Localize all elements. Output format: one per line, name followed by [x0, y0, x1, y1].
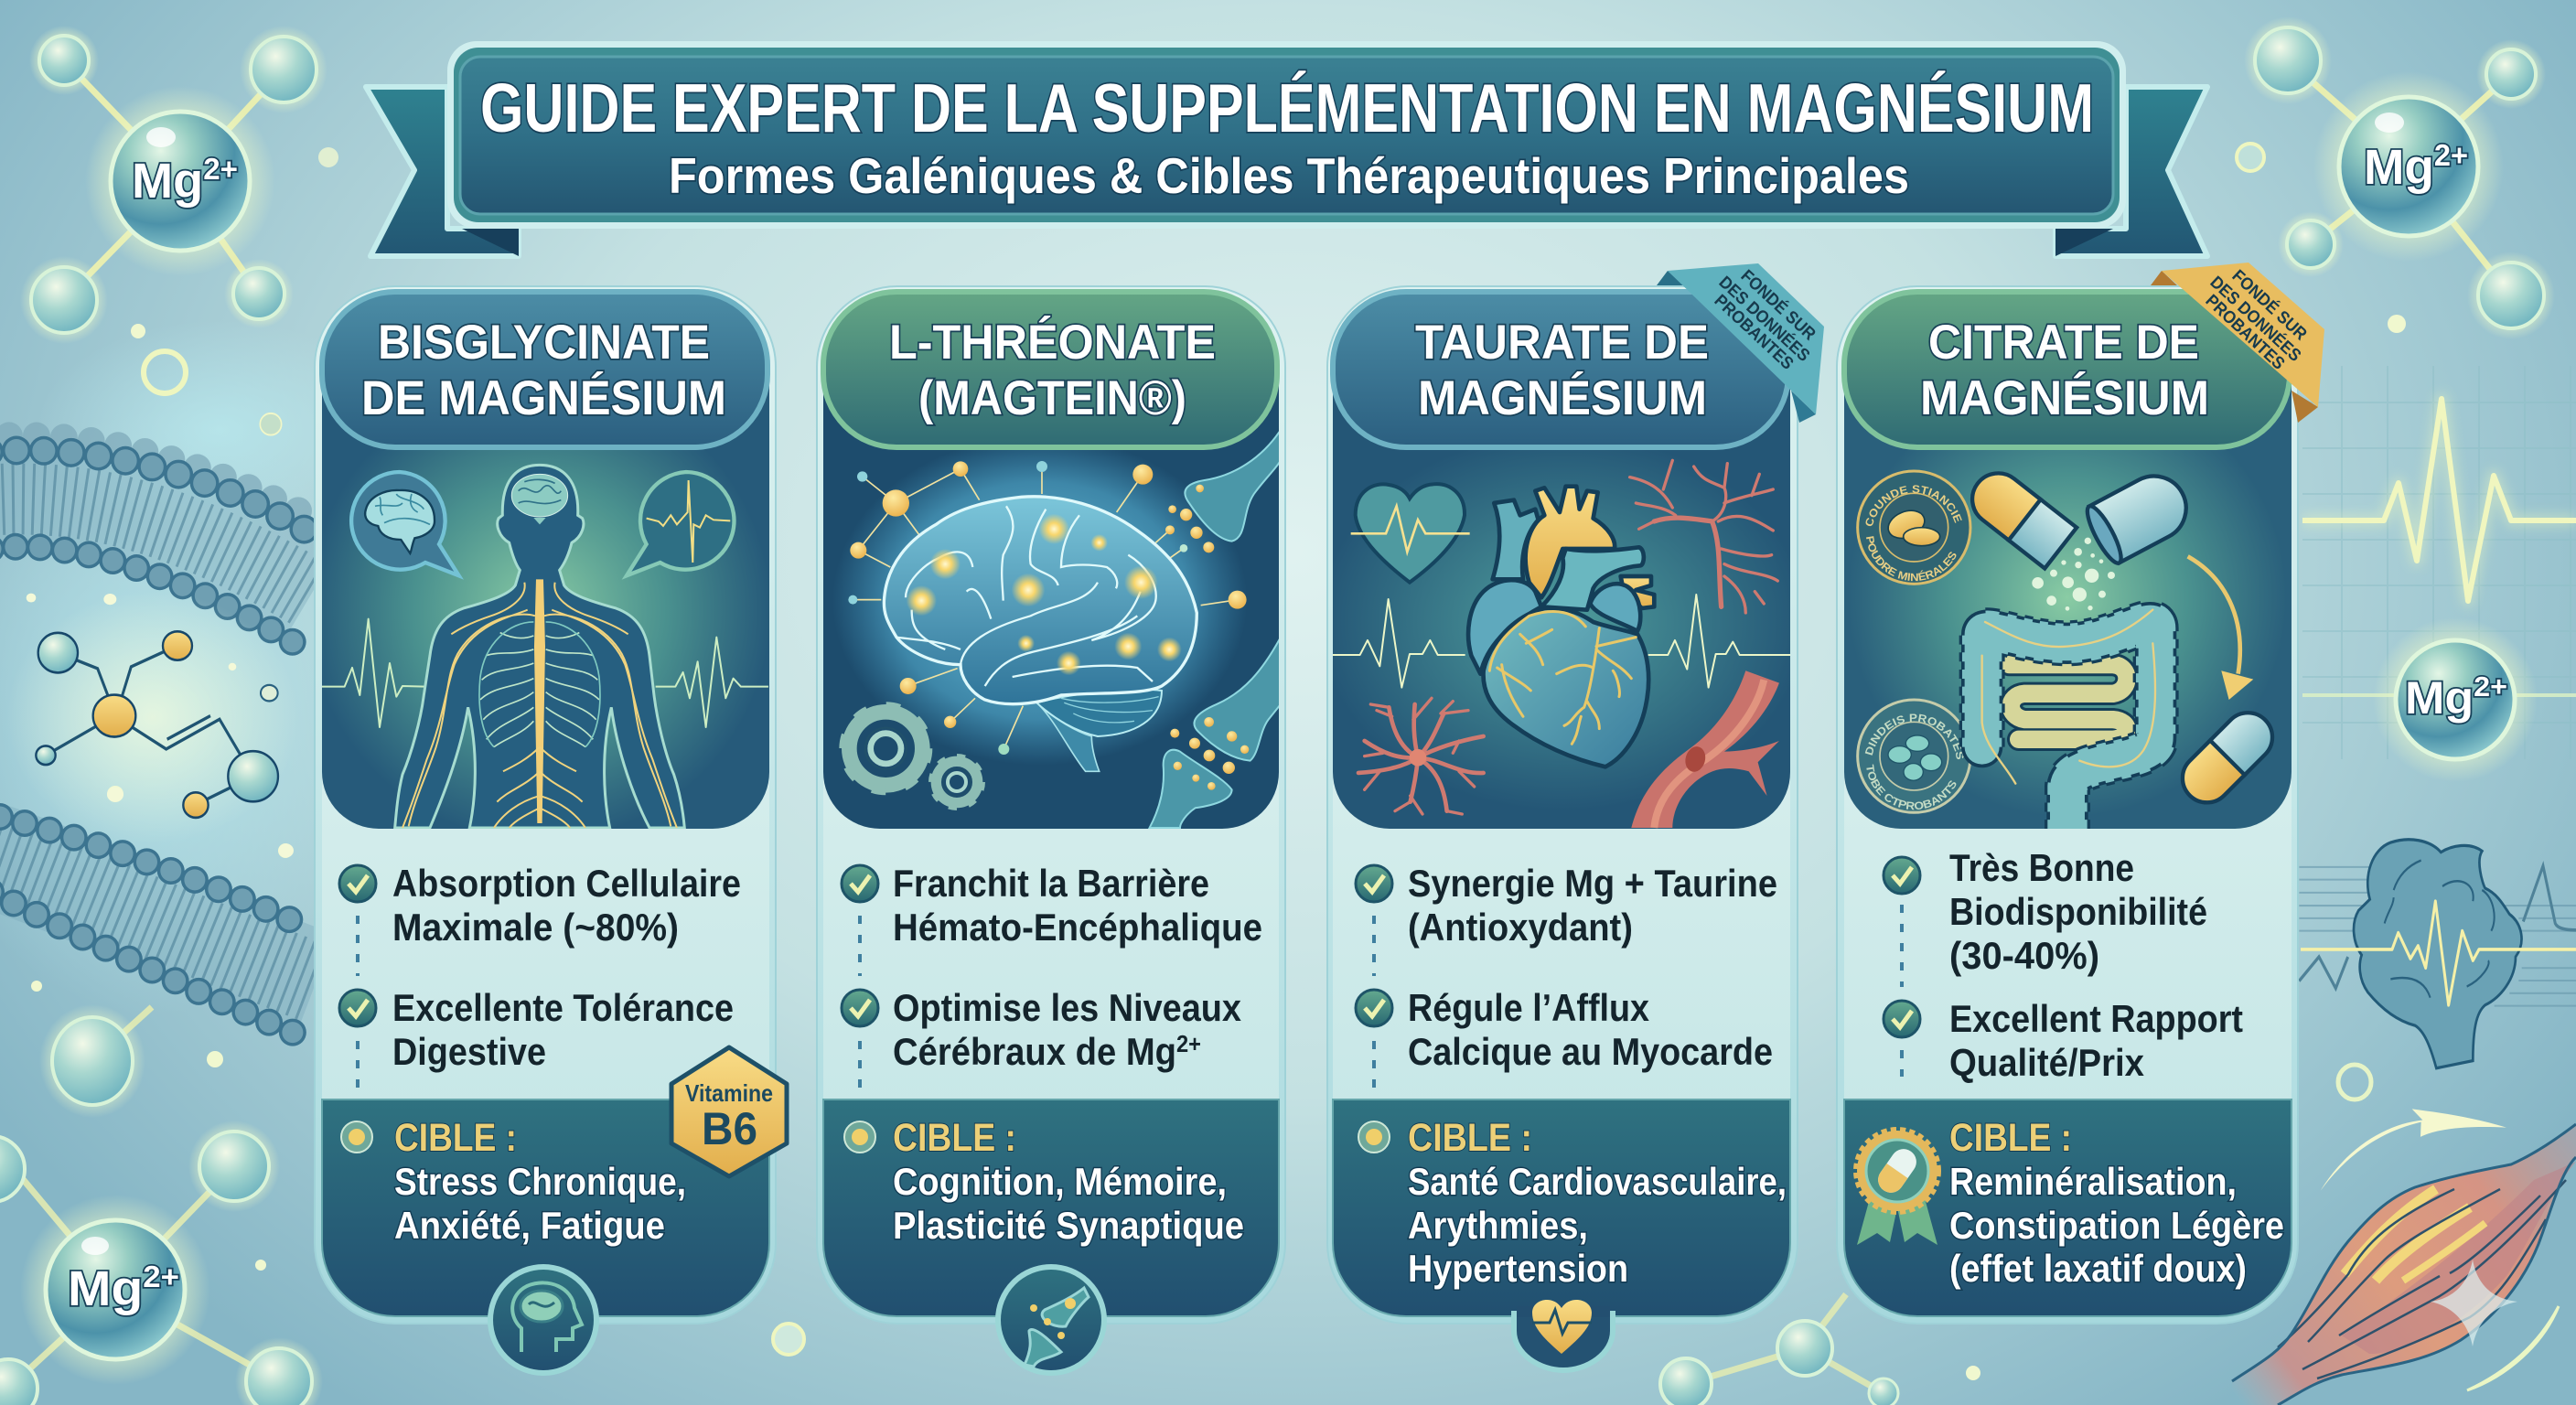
anatomical heart [1468, 487, 1654, 767]
target panel: Hypertension [1408, 1247, 1628, 1290]
membrane lower [0, 817, 316, 1040]
arrow [2188, 556, 2253, 700]
title banner [366, 41, 2207, 256]
target panel: Constipation Légère [1949, 1204, 2284, 1247]
title: GUIDE EXPERT DE LA SUPPLÉMENTATION EN MAGNÉSIUM [480, 70, 2094, 146]
target panel: CIBLE : [1949, 1116, 2072, 1160]
molecule: Mg top right: Mg [2364, 140, 2435, 195]
target panel: Anxiété, Fatigue [394, 1204, 665, 1247]
benefits list: Qualité/Prix [1949, 1041, 2145, 1084]
benefits list [339, 862, 741, 1090]
decoration: muscle fibre [2232, 1124, 2576, 1405]
header pill [322, 292, 767, 447]
benefits list: Cérébraux de Mg [893, 1030, 1205, 1073]
header pill [1844, 292, 2290, 447]
benefits list: Biodisponibilité [1949, 890, 2207, 933]
benefits list: Synergie Mg + Taurine [1408, 862, 1777, 905]
benefits list: Hémato-Encéphalique [893, 906, 1262, 949]
benefits list: (30-40%) [1949, 934, 2099, 977]
target panel: CIBLE : [394, 1116, 517, 1160]
benefits list: Régule l’Afflux [1408, 986, 1650, 1029]
molecule: Mg top left: 2+ [203, 152, 238, 186]
header pill: BISGLYCINATE [378, 316, 710, 370]
target panel [1844, 1099, 2292, 1316]
benefits list: (Antioxydant) [1408, 906, 1633, 949]
decoration: stylised brain ECG right [2299, 840, 2576, 1068]
card 1: bisglycinate [308, 286, 787, 1373]
seal: tablets [1856, 470, 1972, 585]
target panel: (effet laxatif doux) [1949, 1247, 2247, 1290]
ribbon: evidence based: PROBANTES [2202, 291, 2288, 374]
card 4: citrate [1836, 263, 2324, 1325]
molecule: bottom centre [1660, 1294, 1898, 1405]
icon: synapse [998, 1267, 1104, 1373]
neurons [1358, 460, 1777, 814]
molecule: Mg right middle [2373, 617, 2538, 782]
decoration: ECG line right [2302, 399, 2576, 695]
illustration: glowing brain [823, 366, 1281, 829]
benefits list: Très Bonne [1949, 846, 2134, 889]
target panel [322, 1099, 769, 1316]
ribbon: evidence based: DES DONNÉES [2206, 273, 2305, 366]
header pill: CITRATE DE [1928, 316, 2199, 370]
target panel: Arythmies, [1408, 1204, 1588, 1247]
decoration: curved arrow [2321, 1109, 2506, 1191]
ecg [1331, 595, 1791, 688]
header pill: L-THRÉONATE [889, 315, 1216, 370]
mini heart [1356, 484, 1465, 583]
molecule: glycine structure [6, 413, 299, 858]
header pill: TAURATE DE [1415, 316, 1709, 370]
icon: medal [1857, 1131, 1937, 1245]
target panel [823, 1099, 1279, 1316]
header pill [1333, 292, 1788, 447]
subtitle: Formes Galéniques & Cibles Thérapeutiques Principales [669, 147, 1909, 204]
molecule: Mg top left [20, 26, 327, 344]
target panel: CIBLE : [893, 1116, 1016, 1160]
ribbon: left tail [366, 87, 519, 256]
illustration: digestive system [1844, 386, 2292, 829]
molecule: Mg right middle: 2+ [2474, 670, 2507, 702]
intestine [1982, 610, 2156, 835]
seal: probiotics: DINDEIS PROBATES [1864, 713, 1964, 759]
header pill: MAGNÉSIUM [1418, 370, 1707, 425]
membrane upper [0, 435, 316, 653]
decoration: light zones left [0, 320, 402, 1015]
gears [843, 706, 982, 808]
ribbon: evidence based [1657, 263, 1824, 423]
icon: head with brain [490, 1267, 596, 1373]
synapses [1150, 430, 1281, 828]
card 2: L-thréonate [817, 286, 1285, 1373]
seal: probiotics: TOBE CTPROBANTS [1866, 765, 1956, 810]
molecule: Mg bottom left: Mg [68, 1261, 139, 1316]
ribbon: evidence based: FONDÉ SUR [1737, 266, 1819, 345]
icon: heart tab [1514, 1300, 1613, 1370]
badge: vitamine B6 [671, 1047, 787, 1176]
illustration: heart [1333, 389, 1790, 829]
molecule: Mg bottom left: 2+ [143, 1260, 179, 1293]
ribbon: evidence based: DES DONNÉES [1715, 273, 1814, 366]
decoration: ECG grid right [2302, 366, 2576, 759]
seal: tablets: COUNDE STIANCIES [1866, 485, 1962, 527]
powder dots [2032, 538, 2115, 611]
benefits list: Calcique au Myocarde [1408, 1030, 1773, 1073]
molecule: Mg top right [2244, 16, 2555, 339]
target panel: Cognition, Mémoire, [893, 1160, 1227, 1203]
benefits list [1356, 862, 1777, 1090]
ribbon: right tail [2055, 87, 2207, 256]
benefits list: Digestive [392, 1030, 546, 1073]
target panel: Santé Cardiovasculaire, [1408, 1160, 1787, 1203]
header pill: MAGNÉSIUM [1920, 370, 2209, 425]
card 3: taurate [1319, 263, 1824, 1370]
ribbon: evidence based: FONDÉ SUR [2228, 266, 2311, 345]
benefits list: Maximale (~80%) [392, 906, 679, 949]
illustration: nervous system [322, 386, 769, 829]
benefits list: 2+ [1176, 1030, 1201, 1057]
target panel: Stress Chronique, [394, 1160, 686, 1203]
benefits list: Excellent Rapport [1949, 997, 2243, 1040]
target panel: Plasticité Synaptique [893, 1204, 1244, 1247]
artery [1631, 670, 1779, 828]
ribbon: evidence based [2151, 263, 2324, 423]
molecule: Mg top right: 2+ [2434, 138, 2468, 172]
molecule: Mg bottom left [0, 1004, 323, 1405]
benefits list [1884, 846, 2243, 1084]
target panel: Reminéralisation, [1949, 1160, 2237, 1203]
seal: probiotics [1856, 699, 1971, 814]
header pill [823, 292, 1277, 447]
seal: tablets: POUDRE MINÉRALES [1866, 536, 1956, 582]
capsules [1962, 463, 2077, 568]
target panel: CIBLE : [1408, 1116, 1532, 1160]
ribbon: evidence based: PROBANTES [1711, 291, 1797, 374]
benefits list [842, 862, 1262, 1090]
molecule: Mg right middle: Mg [2405, 672, 2471, 724]
target panel [1333, 1099, 1790, 1316]
benefits list: Absorption Cellulaire [392, 862, 741, 905]
header pill: (MAGTEIN®) [918, 371, 1186, 425]
benefits list: Optimise les Niveaux [893, 986, 1242, 1029]
benefits list: Excellente Tolérance [392, 986, 734, 1029]
molecule: Mg top left: Mg [132, 154, 203, 209]
badge: vitamine B6: B6 [702, 1103, 757, 1154]
badge: vitamine B6: Vitamine [685, 1079, 773, 1107]
header pill: DE MAGNÉSIUM [361, 370, 726, 425]
benefits list: Franchit la Barrière [893, 862, 1209, 905]
